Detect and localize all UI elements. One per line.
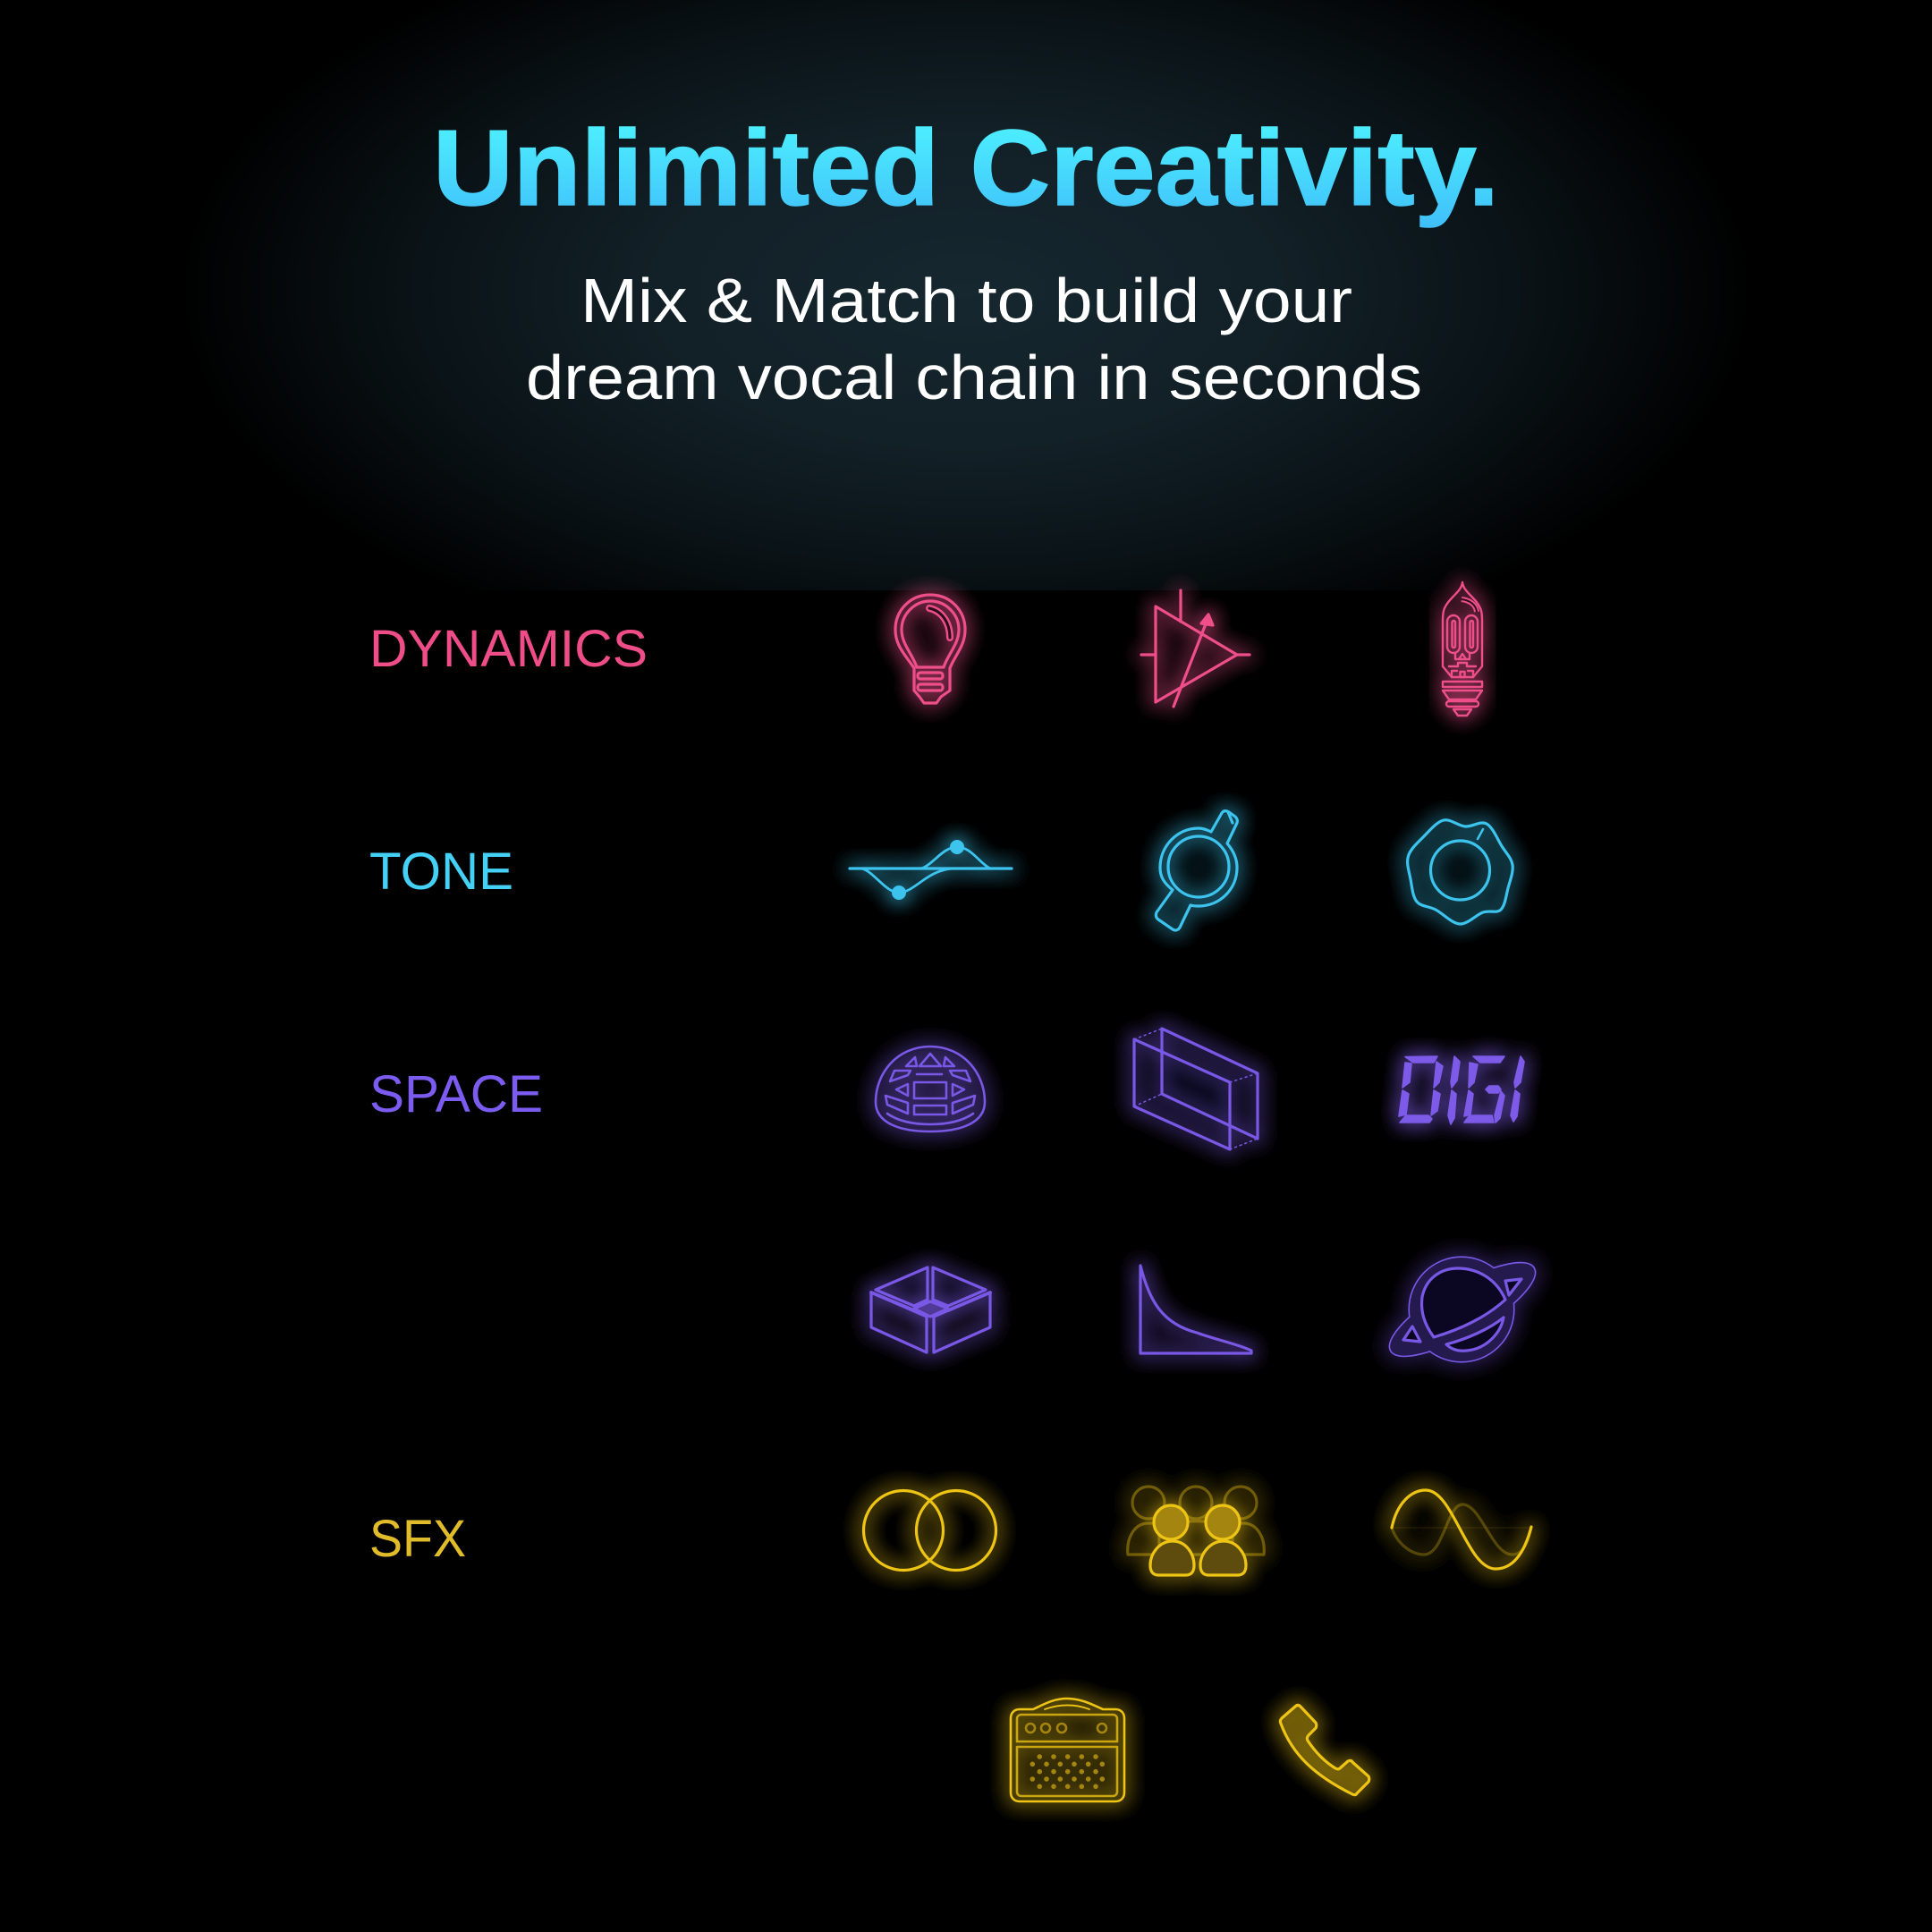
icon: eq curve (850, 840, 1012, 900)
icon: light bulb (895, 595, 965, 703)
icon: open box (871, 1267, 990, 1352)
icon: dome (876, 1046, 985, 1131)
panel: space rows (369, 1029, 1546, 1371)
icon: sine waves (1392, 1490, 1531, 1569)
header glow background (0, 0, 1932, 590)
icon: ringed planet (1379, 1248, 1546, 1371)
label: tone: TONE (369, 843, 513, 901)
icon: overlapping circles (864, 1490, 996, 1571)
icon: digi display (1399, 1056, 1524, 1124)
icon: glass panes (1134, 1029, 1258, 1149)
subtitle: Mix & Match to build your (580, 266, 1352, 335)
icon: wavy knob (1408, 820, 1513, 924)
panel: sfx rows (369, 1487, 1531, 1801)
subtitle (526, 266, 1422, 412)
icon: pointer knob (1156, 811, 1237, 930)
title: Unlimited Creativity. (433, 108, 1499, 228)
icon: amplifier triangle with arrow (1141, 590, 1250, 707)
icon: telephone handset (1280, 1705, 1369, 1795)
panel: dynamics row (369, 582, 1482, 716)
panel: tone row (369, 811, 1513, 930)
icon: decay curve (1140, 1266, 1251, 1353)
label: space: SPACE (369, 1065, 543, 1123)
subtitle: dream vocal chain in seconds (526, 343, 1422, 412)
label: dynamics: DYNAMICS (369, 620, 648, 678)
label: sfx: SFX (369, 1510, 466, 1568)
icon: guitar amp (1011, 1699, 1124, 1801)
icon: crowd of people (1128, 1487, 1264, 1575)
icon: vacuum tube (1443, 582, 1482, 716)
